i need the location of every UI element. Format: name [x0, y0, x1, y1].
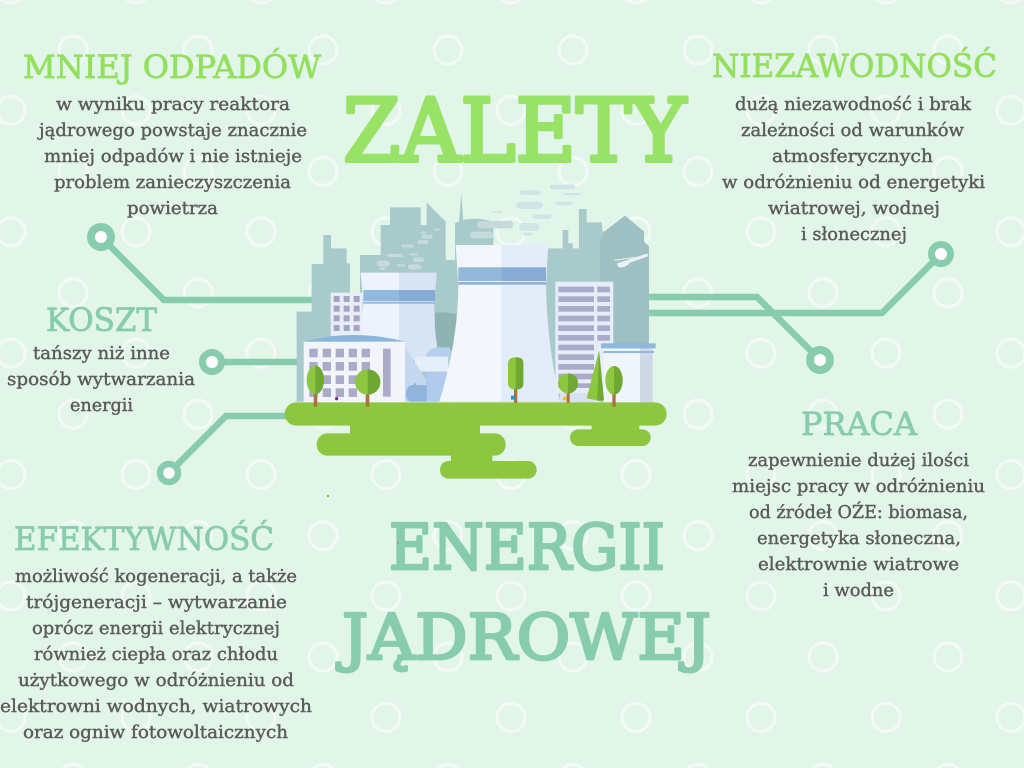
body text: miejsc pracy w odróżnieniu — [732, 476, 985, 497]
trees — [307, 351, 623, 407]
body text: wiatrowej, wodnej — [768, 198, 940, 219]
tree 4 — [558, 373, 578, 403]
connector: niezawodnosc — [648, 254, 941, 313]
small right building — [601, 343, 656, 402]
body text — [0, 566, 312, 743]
body text: atmosferycznych — [772, 146, 933, 167]
title: zalety: ZALETY — [343, 80, 687, 182]
body text: dużą niezawodność i brak — [735, 94, 972, 115]
body text: zależności od warunków — [741, 120, 965, 141]
body text: od źródeł OŹE: biomasa, — [749, 500, 968, 523]
panel: koszt — [7, 301, 195, 416]
body text — [7, 343, 195, 416]
panel: niezawodnosc — [712, 47, 997, 245]
tree 2 — [355, 369, 380, 407]
body text: energii — [70, 395, 133, 416]
body text: problem zanieczyszczenia — [54, 172, 291, 193]
front left building — [304, 335, 405, 402]
back office building — [331, 293, 363, 336]
cone tree — [587, 351, 604, 402]
connector: mniej odpadow — [101, 237, 312, 300]
heading: PRACA — [801, 405, 918, 443]
illustration: nuclear power plant — [285, 184, 667, 479]
body text — [722, 94, 985, 245]
tree 1 — [307, 366, 324, 407]
auxiliary blocks and tank — [405, 347, 450, 402]
body text: zapewnienie dużej ilości — [748, 450, 969, 471]
heading: MNIEJ ODPADÓW — [23, 48, 321, 86]
node: koszt — [202, 352, 222, 372]
heading: EFEKTYWNOŚĆ — [14, 520, 274, 558]
title: energii jadrowej — [336, 511, 711, 674]
body text: trójgeneracji – wytwarzanie — [26, 592, 287, 613]
body text: elektrowni wodnych, wiatrowych — [0, 696, 312, 717]
body text: elektrownie wiatrowe — [758, 554, 959, 575]
panel: praca — [732, 405, 985, 601]
body text: sposób wytwarzania — [7, 369, 195, 390]
connector: praca — [650, 297, 820, 360]
body text — [37, 94, 307, 219]
body text: energetyka słoneczna, — [757, 528, 961, 549]
body text: również ciepła oraz chłodu — [34, 644, 278, 665]
body text — [732, 450, 985, 601]
body text: w odróżnieniu od energetyki — [722, 172, 985, 193]
body text: oraz ogniw fotowoltaicznych — [23, 722, 288, 743]
tree 5 — [605, 366, 623, 407]
heading: NIEZAWODNOŚĆ — [712, 47, 997, 85]
panel: mniej odpadow — [23, 48, 321, 219]
node: niezawodnosc — [932, 244, 950, 264]
node: efektywnosc — [160, 464, 178, 482]
main cooling tower — [439, 245, 560, 402]
tree 3 — [508, 357, 523, 403]
body text: tańszy niż inne — [33, 343, 170, 364]
body text: mniej odpadów i nie istnieje — [44, 146, 302, 167]
body text: oprócz energii elektrycznej — [32, 618, 280, 639]
flowers — [335, 396, 567, 401]
title: energii jadrowej: ENERGII — [389, 511, 665, 584]
node: mniej odpadow — [91, 227, 111, 247]
small cooling tower — [360, 273, 440, 360]
right office building — [555, 282, 613, 402]
city skyline — [297, 193, 649, 402]
connector lines — [91, 227, 950, 482]
connector: efektywnosc — [169, 416, 292, 473]
heading: KOSZT — [46, 301, 158, 339]
body text: i słonecznej — [801, 224, 907, 245]
body text: i wodne — [823, 580, 894, 601]
panel: efektywnosc — [0, 520, 312, 743]
body text: w wyniku pracy reaktora — [56, 94, 290, 115]
title: energii jadrowej: JĄDROWEJ — [336, 601, 711, 674]
stray dots — [327, 495, 399, 544]
node: praca — [810, 350, 830, 370]
connector: koszt — [212, 359, 298, 365]
body text: jądrowego powstaje znacznie — [37, 120, 307, 141]
ground — [285, 402, 667, 479]
helicopter — [614, 254, 648, 268]
body text: użytkowego w odróżnieniu od — [18, 670, 294, 691]
body text: powietrza — [127, 198, 218, 219]
body text: możliwość kogeneracji, a także — [15, 566, 297, 587]
smoke clouds — [377, 184, 581, 270]
